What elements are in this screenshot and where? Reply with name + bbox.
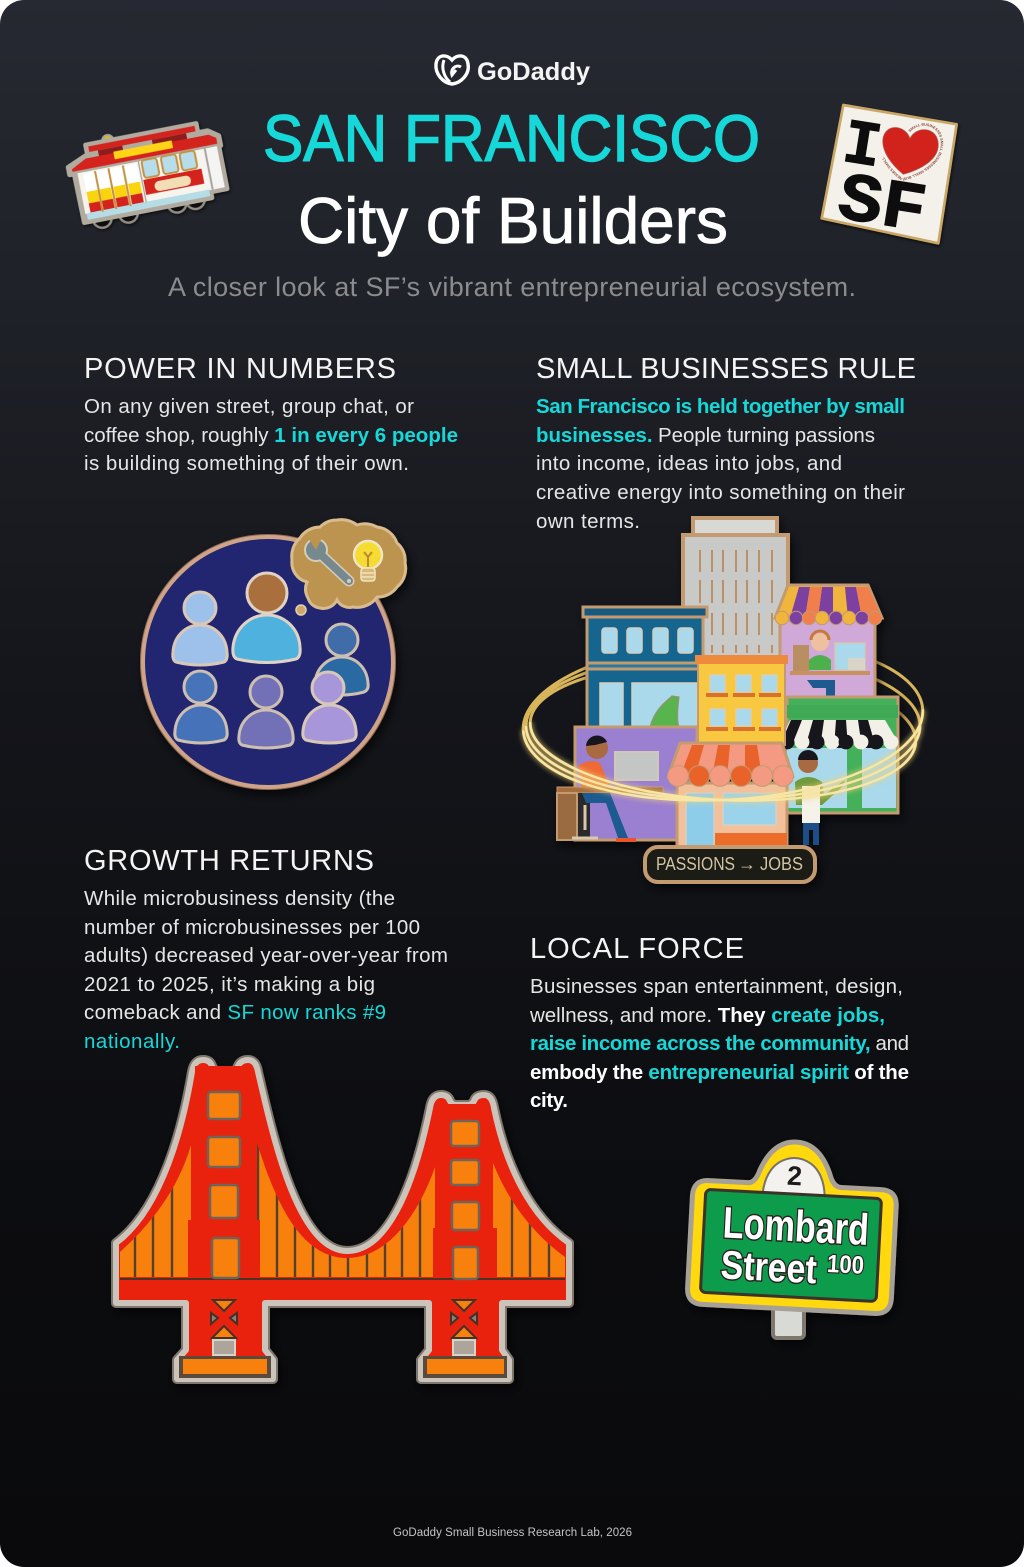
text block: 2021 to 2025, it’s making a big — [84, 973, 375, 996]
striped awning scallops — [780, 735, 898, 749]
text block: own terms. — [536, 510, 640, 533]
icon: I love SF pin: SF — [833, 161, 931, 251]
footer source: GoDaddy Small Business Research Lab, 2026 — [393, 1527, 632, 1539]
towers — [188, 1066, 260, 1280]
text block: businesses. People turning passions — [536, 424, 875, 447]
text block: city. — [530, 1089, 568, 1112]
person 5 — [239, 676, 293, 748]
rings behind — [519, 630, 927, 810]
cat — [650, 696, 679, 727]
icon: I love SF pin: I — [838, 109, 886, 186]
tagline: A closer look at SF’s vibrant entrepreneurial ecosystem. — [168, 272, 856, 302]
street name: Lombard — [722, 1198, 870, 1255]
icon: I love SF pin: SMALL BUSINESSES SMALL BUSINESSES SMALL BUSINESSES SMALL — [882, 123, 944, 181]
peach awning scallops — [668, 766, 793, 786]
heading: GROWTH RETURNS — [84, 845, 374, 877]
yellow building — [695, 655, 788, 745]
purple office — [557, 727, 697, 842]
lilac awning scallops — [775, 611, 882, 625]
left tower bracing — [211, 1300, 237, 1355]
sign post — [773, 1300, 804, 1338]
panel: power in numbers — [84, 353, 458, 475]
text block — [536, 395, 905, 533]
tower — [683, 518, 788, 665]
title: SAN FRANCISCO — [263, 101, 760, 175]
text block — [529, 975, 909, 1112]
worker — [572, 736, 636, 842]
barista woman — [790, 631, 870, 697]
panel: local force — [529, 933, 909, 1112]
text block — [84, 395, 458, 475]
icon: group of people pin — [140, 520, 406, 790]
green shop — [780, 697, 898, 813]
icon: lombard street sign pin: 100 — [826, 1250, 865, 1280]
text block: adults) decreased year-over-year from — [84, 944, 448, 967]
subtitle line: City of Builders: City of Builders — [298, 184, 728, 257]
deck — [120, 1280, 565, 1299]
tower windows — [208, 1092, 479, 1279]
text block: On any given street, group chat, or — [84, 395, 414, 418]
panel: small businesses rule — [536, 353, 916, 533]
heading: SMALL BUSINESSES RULE — [536, 353, 916, 385]
icon: light bulb — [354, 541, 382, 581]
person 2 — [233, 573, 300, 662]
left open section — [83, 163, 144, 214]
blue building — [583, 607, 707, 730]
thought dot — [296, 605, 306, 615]
text block: embody the entrepreneurial spirit of the — [530, 1061, 909, 1084]
icon: city storefronts pin — [519, 518, 927, 882]
heading: POWER IN NUMBERS — [84, 353, 396, 385]
text block — [84, 887, 448, 1053]
text block: creative energy into something on their — [536, 481, 905, 504]
text block: into income, ideas into jobs, and — [536, 452, 842, 475]
logo: GoDaddy — [436, 56, 590, 86]
text block: Businesses span entertainment, design, — [530, 975, 903, 998]
rings front — [523, 710, 927, 810]
icon: cable car pin — [63, 114, 232, 232]
route number: 2 — [786, 1161, 803, 1191]
icon: golden gate bridge pin — [110, 1060, 580, 1379]
text block: San Francisco is held together by small — [536, 395, 905, 418]
title — [263, 101, 760, 257]
text block: number of microbusinesses per 100 — [84, 916, 420, 939]
right foot — [423, 1356, 507, 1378]
heading: LOCAL FORCE — [530, 933, 744, 965]
person 6 — [303, 672, 356, 743]
text block: While microbusiness density (the — [84, 887, 395, 910]
orange suspension panels — [120, 1143, 565, 1277]
text block: coffee shop, roughly 1 in every 6 people — [84, 424, 458, 447]
text block: raise income across the community, and — [530, 1032, 909, 1055]
badge: passions to jobs: → — [738, 854, 756, 874]
person 1 — [173, 592, 227, 665]
icon: I love SF pin — [820, 104, 960, 251]
badge: passions to jobs: JOBS — [760, 854, 803, 874]
peach shop — [668, 743, 793, 849]
badge: passions to jobs: PASSIONS — [656, 854, 735, 874]
baker — [795, 750, 845, 845]
icon: lombard street sign pin — [687, 1137, 899, 1338]
person 4 — [175, 671, 227, 743]
text block: wellness, and more. They create jobs, — [529, 1004, 885, 1027]
badge: passions to jobs — [645, 847, 815, 882]
icon: wrench — [305, 538, 351, 583]
person 3 — [315, 624, 368, 695]
left foot — [179, 1356, 271, 1378]
text block: comeback and SF now ranks #9 — [84, 1001, 386, 1024]
thought cloud — [292, 520, 406, 608]
text block: is building something of their own. — [84, 452, 409, 475]
icon: lombard street sign pin: Street — [720, 1243, 818, 1292]
panel: growth returns — [84, 845, 448, 1053]
text block: nationally. — [84, 1030, 180, 1053]
lilac shop — [775, 585, 882, 700]
logo: GoDaddy: GoDaddy — [477, 58, 590, 86]
right tower bracing — [451, 1300, 477, 1355]
